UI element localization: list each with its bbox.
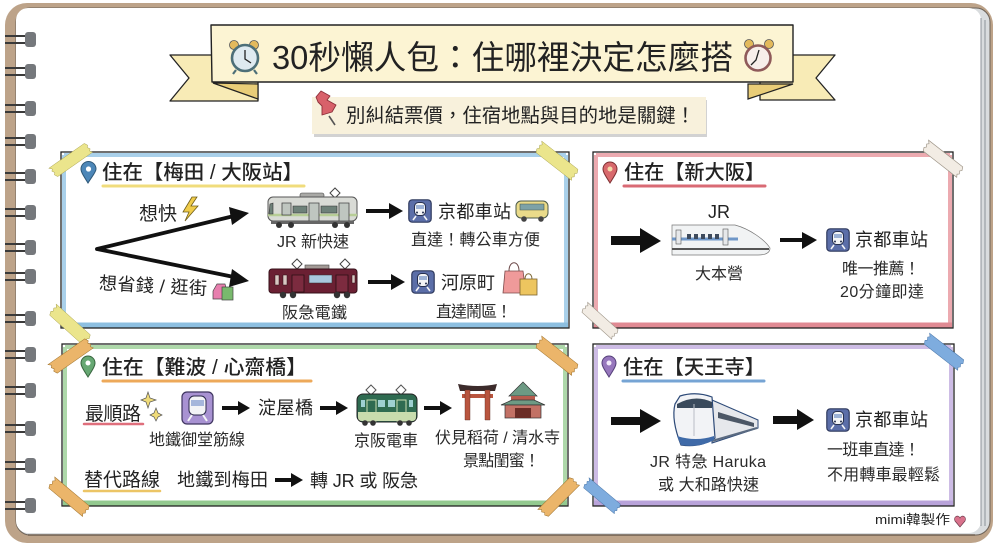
label: Kyoto Station: 京都車站 [438, 202, 511, 222]
icon: metro [827, 409, 849, 431]
underline [84, 490, 160, 492]
arrow [611, 409, 661, 433]
label: JR Shin-Kaisoku: JR 新快速 [277, 233, 349, 251]
arrow [320, 401, 348, 415]
icon: torii gate [458, 384, 497, 420]
icon: metro [827, 229, 849, 251]
label: want fast: 想快 [139, 203, 177, 225]
arrow [424, 401, 452, 415]
icon: JR Shin-Kaisoku train [268, 188, 357, 228]
ribbon tails [170, 55, 835, 101]
label: JR Haruka: JR 特急 Haruka [650, 452, 766, 471]
icon: shinkansen [672, 225, 770, 255]
arrow [773, 409, 814, 430]
label: headquarters: 大本營 [695, 265, 743, 283]
spiral binding rings [5, 32, 36, 513]
label: Midosuji line: 地鐵御堂筋線 [149, 431, 245, 449]
icon: teal alarm clock [230, 40, 258, 74]
heading: 住在【天王寺】 [623, 356, 765, 379]
icon: small shopping bags [213, 284, 233, 300]
title ribbon [170, 25, 835, 101]
title text: 30秒懶人包：住哪裡決定怎麼搭 [272, 39, 733, 76]
heading underline [624, 184, 765, 188]
heading underline [103, 380, 311, 382]
heading: 住在【難波 / 心齋橋】 [102, 356, 307, 379]
icon: bus [516, 201, 548, 222]
fork arrows [97, 207, 249, 287]
label: transfer: 轉 JR 或 阪急 [310, 471, 418, 491]
icon: red alarm clock [744, 40, 774, 70]
icon: sparkles [141, 392, 162, 421]
arrow [275, 473, 303, 487]
heading: 住在【梅田 / 大阪站】 [102, 161, 303, 184]
label: Kyoto Station: 京都車站 [855, 230, 928, 250]
arrow [222, 401, 250, 415]
panel: Shin-Osaka [580, 140, 964, 339]
icon: purple metro [182, 392, 213, 424]
arrow [780, 232, 817, 249]
icon: shopping bags [503, 263, 537, 295]
icon: Haruka train [674, 394, 758, 446]
panel frame [593, 152, 953, 328]
subtitle note [312, 91, 707, 137]
label: alternative route: 替代路線 [84, 469, 160, 491]
tape decorations [580, 140, 964, 339]
note: no transfer: 不用轉車最輕鬆 [827, 465, 940, 484]
panel frame [593, 344, 954, 506]
label: Hankyu: 阪急電鐵 [282, 303, 347, 322]
icon: green location pin [81, 356, 95, 377]
icon: Keihan train [357, 385, 417, 426]
tape decorations [48, 141, 579, 345]
heading underline [103, 184, 304, 188]
label: smoothest route: 最順路 [85, 403, 141, 425]
icon: heart [955, 516, 965, 527]
label: Yamatoji rapid: 或 大和路快速 [658, 476, 759, 494]
tape decorations [582, 333, 965, 514]
icon: metro [409, 200, 431, 222]
tape decorations [47, 336, 580, 518]
note: direct train: 一班車直達！ [827, 441, 920, 459]
icon: Hankyu train [269, 259, 357, 298]
note: sightseeing: 景點閨蜜！ [463, 451, 540, 470]
label: Yodoyabashi: 淀屋橋 [258, 398, 313, 418]
heading: 住在【新大阪】 [624, 161, 765, 184]
underline [84, 423, 143, 425]
label: save money: 想省錢 / 逛街 [99, 273, 207, 299]
icon: red push pin [316, 91, 336, 125]
arrow [611, 228, 661, 253]
ribbon band [211, 25, 793, 82]
icon: lightning [183, 197, 198, 221]
label: Keihan: 京阪電車 [354, 432, 418, 450]
note: 20 minutes: 20分鐘即達 [840, 283, 924, 301]
label: JR: JR [708, 202, 730, 222]
icon: temple [501, 382, 545, 418]
note: direct, bus transfer: 直達！轉公車方便 [411, 231, 540, 249]
arrow [368, 274, 405, 290]
icon: purple location pin [602, 356, 616, 377]
panel: Namba / Shinsaibashi [47, 336, 580, 518]
panel frame [62, 344, 568, 506]
icon: blue location pin [81, 162, 96, 183]
label: Kyoto Station: 京都車站 [855, 410, 928, 430]
panel: Umeda / Osaka [48, 141, 579, 345]
label: Fushimi Inari / Kiyomizu: 伏見稻荷 / 清水寺 [435, 429, 560, 447]
arrow [366, 203, 403, 219]
icon: metro [412, 271, 434, 293]
subtitle text: 別糾結票價，住宿地點與目的地是關鍵！ [346, 105, 695, 127]
panel: Tennoji [582, 333, 965, 514]
heading underline [623, 380, 764, 382]
label: Kawaramachi: 河原町 [441, 273, 495, 293]
credit: mimi韓製作 [875, 512, 950, 527]
panel frame [61, 152, 569, 328]
note: direct to downtown: 直達鬧區！ [436, 303, 512, 321]
note: recommended: 唯一推薦！ [842, 260, 920, 278]
label: metro to Umeda: 地鐵到梅田 [177, 470, 268, 490]
icon: red location pin [603, 162, 617, 183]
